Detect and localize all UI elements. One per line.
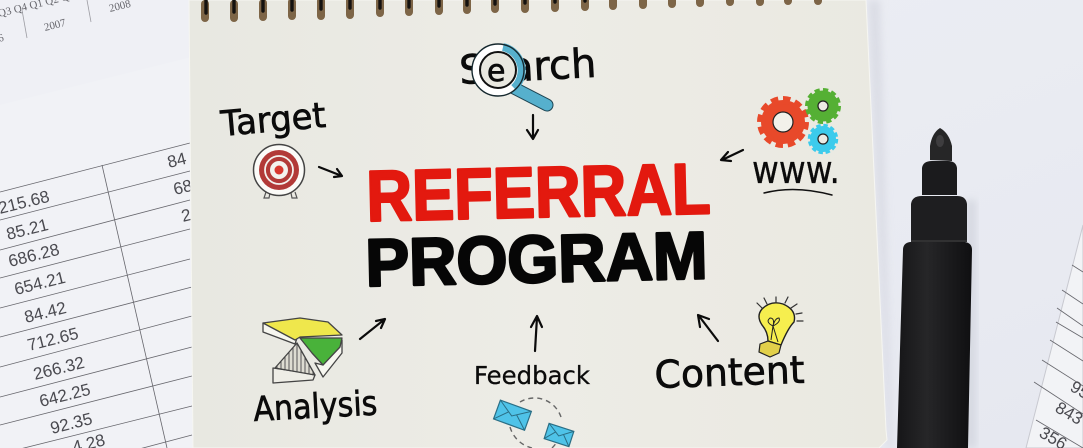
- spreadsheet numbers: 654.21: [12, 268, 67, 299]
- title: REFERRAL: REFERRAL: [366, 149, 711, 237]
- spreadsheet numbers: 2: [179, 205, 193, 226]
- arrow: www to title: [721, 150, 743, 161]
- icon: light bulb: [757, 297, 803, 357]
- spreadsheet header labels: 2007: [43, 17, 68, 34]
- label: Search: Search: [458, 41, 597, 94]
- notepad shadow: [868, 0, 892, 448]
- arrow: search to title: [527, 115, 538, 139]
- icon: pie chart: [263, 318, 342, 383]
- arrow: feedback to title: [531, 316, 542, 351]
- panel: left spreadsheet paper: [0, 0, 200, 448]
- arrow: content to title: [698, 315, 718, 341]
- icon: magnifying glass: e: [487, 54, 505, 89]
- arrow: target to title: [319, 167, 342, 177]
- spreadsheet numbers: 266.32: [31, 353, 86, 384]
- panel: right spreadsheet paper: [1026, 225, 1083, 448]
- spreadsheet numbers: 686.28: [6, 240, 61, 271]
- spreadsheet grid: [0, 143, 192, 448]
- label: www.: www.: [752, 148, 840, 192]
- spreadsheet numbers: 642.25: [37, 380, 92, 411]
- label: Content: Content: [654, 348, 805, 397]
- spreadsheet numbers: 712.65: [25, 324, 80, 355]
- spreadsheet numbers: 84.42: [22, 298, 68, 327]
- label: Analysis: Analysis: [252, 384, 378, 430]
- spreadsheet numbers: 68: [171, 176, 194, 199]
- icon: envelopes: [494, 398, 574, 448]
- spreadsheet numbers: [0, 149, 194, 448]
- icon: target: [254, 144, 304, 198]
- panel: spiral notepad page: [189, 0, 887, 448]
- spreadsheet numbers: 84: [165, 149, 188, 172]
- spreadsheet numbers: 85.21: [4, 215, 50, 244]
- label: Feedback: Feedback: [474, 361, 591, 390]
- spreadsheet numbers: 92.35: [48, 409, 94, 438]
- marker shadow: [966, 200, 976, 448]
- arrow: analysis to title: [360, 319, 385, 339]
- label: Target: Target: [218, 96, 327, 145]
- icon: black marker pen: [897, 128, 972, 448]
- icon: gears: [761, 90, 838, 152]
- underline: www: [764, 189, 832, 195]
- title: PROGRAM: PROGRAM: [365, 218, 708, 301]
- spiral binding: [205, 0, 818, 18]
- icon: magnifying glass: [472, 44, 547, 105]
- spreadsheet header labels: [0, 0, 133, 45]
